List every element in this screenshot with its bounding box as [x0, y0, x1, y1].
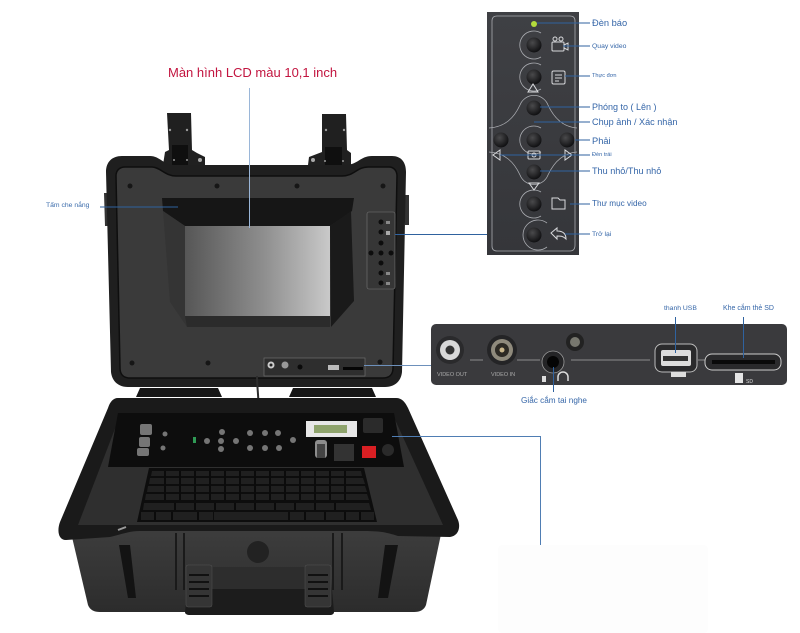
labels: button detail: Thực đơn: [592, 73, 617, 79]
indicator LED: [531, 21, 537, 27]
labels: connector detail: Khe cắm thẻ SD: [723, 303, 774, 312]
buttons: [494, 38, 574, 242]
video out connector: [436, 336, 468, 378]
rim highlight: [118, 527, 126, 530]
green status LEDs: [193, 437, 196, 443]
sun hood: [162, 198, 354, 327]
labels: button detail: Phải: [592, 136, 611, 146]
BNC connector: VIDEO IN: [491, 372, 515, 378]
control deck: [108, 413, 404, 467]
labels: button detail: Chụp ảnh / Xác nhận: [592, 117, 677, 127]
labels: connector detail: [521, 303, 774, 405]
connector socket: [363, 418, 383, 433]
labels: button detail: [500, 18, 677, 238]
cable: [257, 376, 259, 420]
right hinge strap: [308, 114, 351, 165]
labels: button detail: Quay video: [592, 43, 627, 50]
case lid with monitor: [104, 113, 409, 420]
case rim: [58, 398, 459, 540]
BNC connector: [487, 335, 517, 378]
red button: [362, 446, 376, 458]
panel icons: [493, 37, 572, 239]
LCD screen: [185, 226, 330, 316]
lower case with keyboard: [58, 388, 459, 615]
labels: button detail: Đèn báo: [592, 18, 627, 28]
callout: sun hood: [46, 200, 178, 209]
callout line: control deck: [392, 436, 540, 545]
case body: [68, 520, 444, 612]
labels: button detail: Phóng to ( Lên ): [592, 102, 657, 112]
mini button panel: [367, 212, 395, 289]
side grips: [119, 545, 398, 598]
callout line: button panel: [395, 234, 488, 236]
labels: connector detail: thanh USB: [664, 305, 697, 312]
joystick knob: [315, 440, 327, 458]
LCD readout: [306, 421, 357, 437]
lid side tabs: [104, 193, 409, 226]
small screw post: [566, 333, 584, 351]
switch block: [334, 444, 354, 461]
panel: button detail: [487, 12, 579, 255]
front handle and latches: [176, 533, 342, 615]
labels: button detail: Đèn trái: [592, 152, 612, 158]
case hinges: [136, 388, 376, 397]
mini connector panel: [264, 358, 365, 376]
blank white card: [498, 545, 708, 633]
lid shell: [106, 156, 406, 387]
small stick: [382, 444, 394, 456]
panel outline: [489, 16, 577, 251]
connector dots: [137, 424, 296, 456]
lid screws: [128, 184, 386, 366]
callout line: connector panel: [364, 364, 431, 366]
panel: connector detail: [431, 324, 787, 385]
keyboard: [137, 468, 377, 522]
labels: button detail: Trở lại: [592, 230, 612, 238]
labels: button detail: Thư mục video: [592, 199, 647, 208]
callout: sun hood: Tấm che nắng: [46, 200, 90, 209]
SD slot: SD: [746, 379, 753, 385]
labels: connector detail: Giắc cắm tai nghe: [521, 395, 587, 405]
USB port: [655, 344, 697, 377]
labels: button detail: Thu nhỏ/Thu nhỏ: [592, 166, 661, 176]
left hinge strap: [163, 113, 205, 165]
headphone jack: [542, 351, 568, 382]
callout line: LCD: [248, 88, 250, 228]
title: Màn hình LCD màu 10,1 inch: [168, 65, 337, 80]
SD slot: [705, 354, 781, 385]
video out connector: VIDEO OUT: [437, 372, 468, 378]
case floor: [78, 413, 443, 525]
